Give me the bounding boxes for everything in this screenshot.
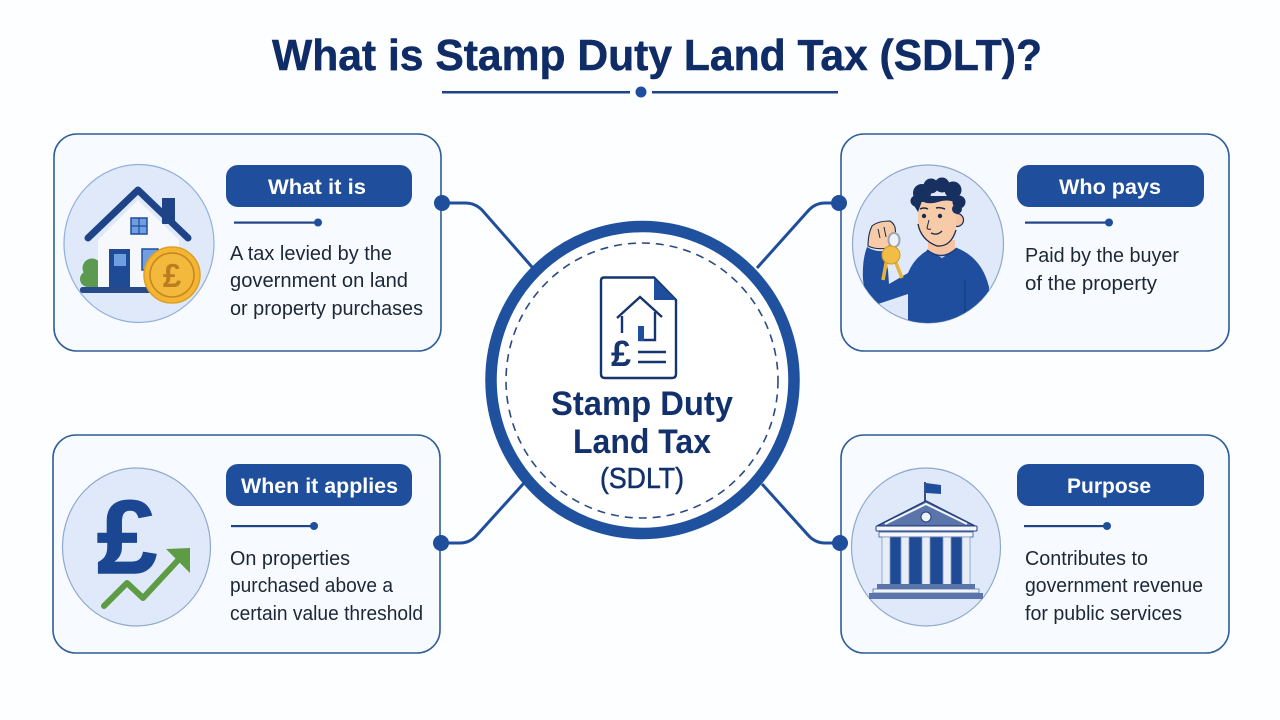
pill underline bbox=[1024, 522, 1111, 530]
pill underline bbox=[231, 522, 318, 530]
heading pill bbox=[226, 165, 412, 207]
icon: house with pound coin bbox=[64, 164, 214, 322]
central label: Land Tax bbox=[573, 423, 711, 461]
heading pill: Who pays bbox=[1059, 176, 1161, 199]
icon: person holding keys bbox=[852, 165, 1004, 330]
description: Paid by the buyer bbox=[1025, 245, 1179, 267]
description bbox=[1025, 245, 1179, 295]
description: A tax levied by the bbox=[230, 243, 392, 265]
heading pill bbox=[226, 464, 412, 506]
description: of the property bbox=[1025, 273, 1157, 295]
panel: purpose bbox=[841, 435, 1229, 653]
icon: pound sign with rising arrow: £ bbox=[97, 480, 157, 596]
panel: what it is bbox=[54, 134, 441, 351]
connector lines bbox=[441, 203, 840, 543]
heading pill bbox=[1017, 165, 1204, 207]
description: government revenue bbox=[1025, 575, 1203, 597]
central label: Stamp Duty bbox=[551, 385, 733, 423]
pill underline bbox=[1025, 218, 1113, 226]
icon: government building bbox=[852, 468, 1000, 626]
connector dots bbox=[433, 195, 848, 551]
description: purchased above a bbox=[230, 575, 394, 597]
panel: who pays bbox=[841, 134, 1229, 351]
heading pill: Purpose bbox=[1067, 475, 1151, 498]
central label: (SDLT) bbox=[600, 463, 684, 495]
description: certain value threshold bbox=[230, 603, 423, 625]
description bbox=[230, 548, 423, 625]
heading pill: When it applies bbox=[241, 475, 398, 498]
description: Contributes to bbox=[1025, 548, 1148, 570]
panel: when it applies bbox=[53, 435, 440, 653]
central circle bbox=[491, 226, 794, 534]
pill underline bbox=[234, 218, 322, 226]
icon: pound sign with rising arrow bbox=[62, 468, 210, 626]
icon: property tax document: £ bbox=[611, 333, 631, 374]
description bbox=[1025, 548, 1203, 625]
central label bbox=[551, 385, 733, 495]
icon: house with pound coin: £ bbox=[163, 257, 182, 294]
title: What is Stamp Duty Land Tax (SDLT)? bbox=[272, 31, 1042, 80]
heading pill bbox=[1017, 464, 1204, 506]
description: or property purchases bbox=[230, 298, 423, 320]
title divider bbox=[442, 86, 838, 98]
description: On properties bbox=[230, 548, 350, 570]
icon: property tax document bbox=[601, 278, 676, 378]
description: government on land bbox=[230, 270, 408, 292]
description bbox=[230, 243, 423, 320]
description: for public services bbox=[1025, 603, 1182, 625]
heading pill: What it is bbox=[268, 176, 366, 199]
